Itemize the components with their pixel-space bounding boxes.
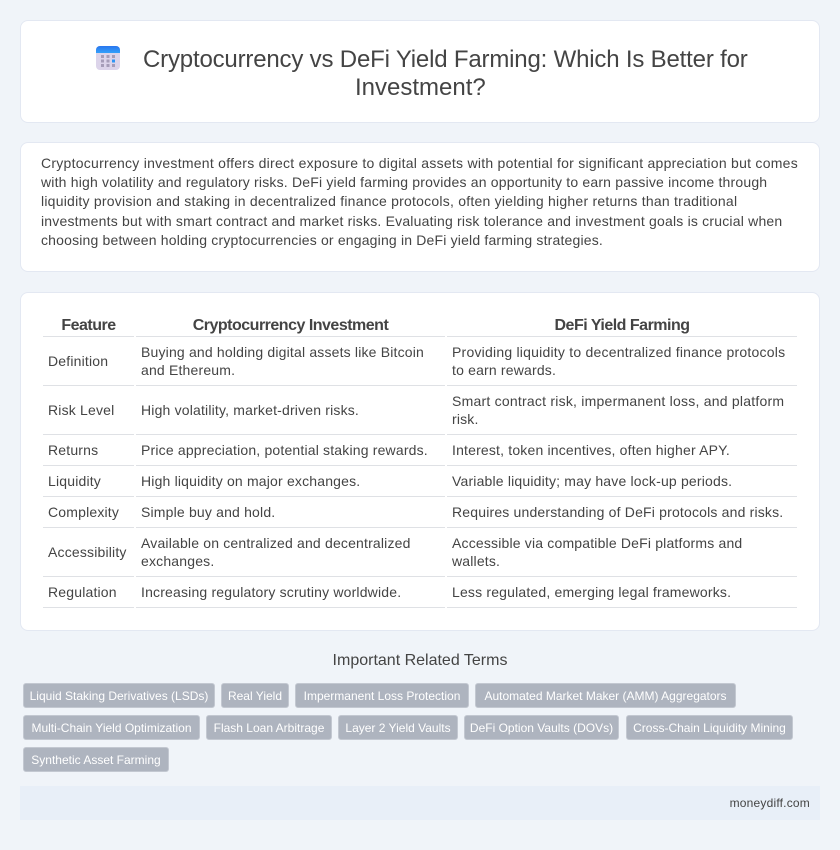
row: returns: Price appreciation, potential staking rewards. — [141, 442, 428, 458]
tag — [221, 683, 289, 708]
row: liquidity — [48, 473, 732, 489]
tag — [475, 683, 736, 708]
row: liquidity: Liquidity — [48, 473, 101, 489]
panel: comparison table — [20, 292, 820, 631]
tag: Multi-Chain Yield Optimization — [31, 721, 192, 735]
row: accessibility: wallets. — [452, 553, 500, 569]
related term tags — [23, 683, 793, 772]
tag: Real Yield — [228, 689, 282, 703]
text block: introduction: choosing between holding cryptocurrencies or engaging in DeFi yield farming strategies. — [41, 232, 603, 248]
row: accessibility — [48, 535, 742, 569]
tag: Liquid Staking Derivatives (LSDs) — [30, 689, 208, 703]
row: complexity — [48, 504, 783, 520]
row: risk level: risk. — [452, 411, 479, 427]
tag: Cross-Chain Liquidity Mining — [633, 721, 786, 735]
title: Cryptocurrency vs DeFi Yield Farming: Which Is Better for — [143, 46, 748, 73]
text block: introduction: liquidity provision and staking in decentralized finance protocols, often yielding higher returns than traditional — [41, 193, 737, 209]
table header: Feature — [61, 317, 116, 334]
tag: Layer 2 Yield Vaults — [345, 721, 451, 735]
row: complexity: Requires understanding of DeFi protocols and risks. — [452, 504, 783, 520]
tag — [206, 715, 332, 740]
text block: introduction — [41, 155, 798, 248]
row: definition: Providing liquidity to decentralized finance protocols — [452, 344, 785, 360]
row: risk level — [48, 393, 784, 427]
tag — [295, 683, 469, 708]
title: Investment? — [355, 74, 486, 101]
tag — [23, 715, 200, 740]
row: liquidity: High liquidity on major exchanges. — [141, 473, 360, 489]
tag — [338, 715, 458, 740]
text block: introduction: with high volatility and regulatory risks. DeFi yield farming provides an opportunity to earn passive income through — [41, 174, 767, 190]
table header: Cryptocurrency Investment — [193, 317, 388, 334]
footer credit: moneydiff.com — [730, 796, 810, 810]
text block: introduction: investments but with smart contract and market risks. Evaluating risk tolerance and investment goals is crucial when — [41, 213, 782, 229]
row: regulation: Regulation — [48, 584, 117, 600]
table header: DeFi Yield Farming — [554, 317, 690, 334]
panel: header — [20, 20, 820, 123]
footer bar — [20, 786, 820, 820]
tag: Synthetic Asset Farming — [31, 753, 161, 767]
row: definition: to earn rewards. — [452, 362, 556, 378]
row: complexity: Complexity — [48, 504, 119, 520]
row: accessibility: Available on centralized and decentralized — [141, 535, 411, 551]
row: regulation — [48, 584, 731, 600]
row: accessibility: Accessible via compatible DeFi platforms and — [452, 535, 742, 551]
tag: DeFi Option Vaults (DOVs) — [470, 721, 613, 735]
row: returns — [48, 442, 730, 458]
row: accessibility: exchanges. — [141, 553, 214, 569]
icon: calendar — [96, 46, 120, 70]
row: regulation: Less regulated, emerging legal frameworks. — [452, 584, 731, 600]
tag: Flash Loan Arbitrage — [214, 721, 324, 735]
row: returns: Interest, token incentives, often higher APY. — [452, 442, 730, 458]
row: accessibility: Accessibility — [48, 544, 127, 560]
heading: important related terms: Important Related Terms — [333, 652, 507, 669]
row: returns: Returns — [48, 442, 98, 458]
tag — [23, 747, 169, 772]
panel: introduction — [20, 142, 820, 272]
tag — [464, 715, 619, 740]
row: risk level: High volatility, market-driven risks. — [141, 402, 359, 418]
tag: Automated Market Maker (AMM) Aggregators — [484, 689, 727, 703]
row: definition: Definition — [48, 353, 108, 369]
tag: Impermanent Loss Protection — [304, 689, 460, 703]
title — [143, 46, 748, 101]
table header — [61, 317, 690, 334]
row: liquidity: Variable liquidity; may have lock-up periods. — [452, 473, 732, 489]
row: definition: and Ethereum. — [141, 362, 235, 378]
tag — [23, 683, 215, 708]
row: complexity: Simple buy and hold. — [141, 504, 275, 520]
row: definition: Buying and holding digital assets like Bitcoin — [141, 344, 424, 360]
row: risk level: Smart contract risk, impermanent loss, and platform — [452, 393, 784, 409]
row: definition — [48, 344, 785, 378]
row: regulation: Increasing regulatory scrutiny worldwide. — [141, 584, 401, 600]
text block: introduction: Cryptocurrency investment offers direct exposure to digital assets with potential for significant appreciation but comes — [41, 155, 798, 171]
row: risk level: Risk Level — [48, 402, 114, 418]
comparison table — [43, 317, 797, 608]
tag — [626, 715, 793, 740]
